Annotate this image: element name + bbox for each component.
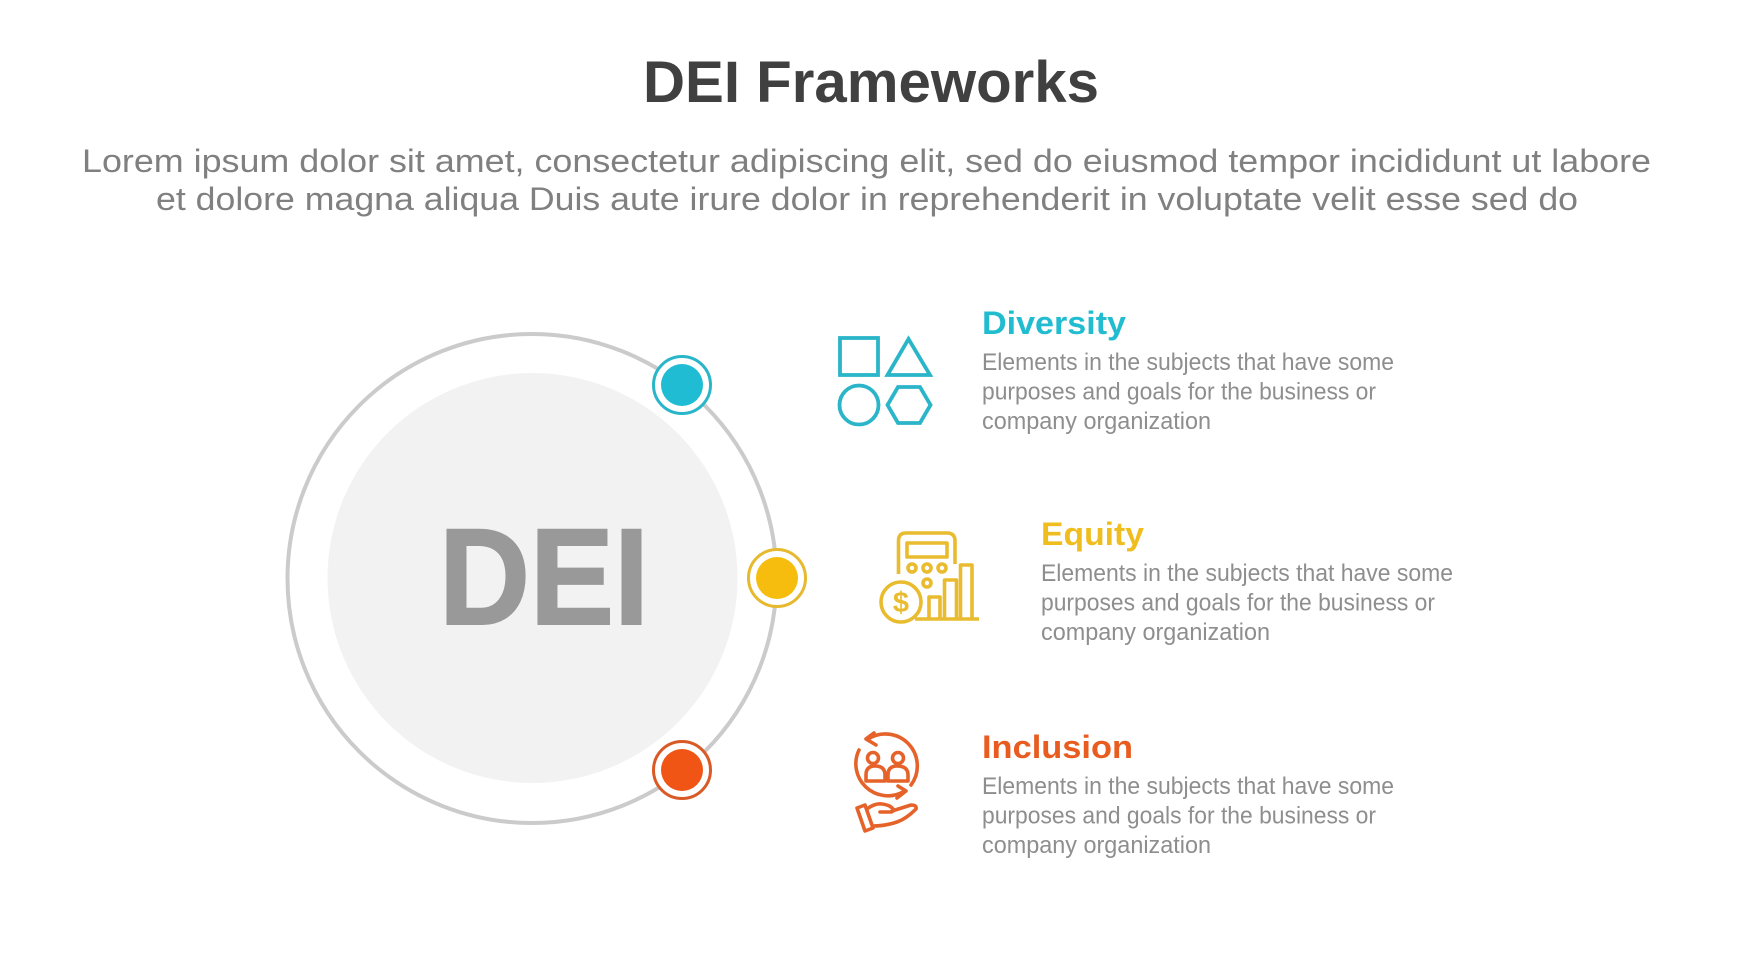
text: diversity body <box>982 349 1394 435</box>
text: diversity body: company organization <box>982 408 1211 435</box>
title: DEI Frameworks <box>643 50 1099 115</box>
inner circle <box>328 373 738 783</box>
panel: diversity <box>982 305 1394 435</box>
text: inclusion body <box>982 773 1394 859</box>
marker: diversity <box>654 356 710 414</box>
DEI label: DEI <box>439 501 649 654</box>
outer ring <box>288 334 776 823</box>
text: inclusion body: Elements in the subjects that have some <box>982 773 1394 800</box>
panel: equity <box>1041 516 1453 646</box>
icon: diversity shapes <box>840 338 930 424</box>
text: inclusion body: company organization <box>982 832 1211 859</box>
text: equity body: Elements in the subjects that have some <box>1041 560 1453 587</box>
heading: inclusion: Inclusion <box>982 729 1133 765</box>
heading: equity: Equity <box>1041 516 1144 552</box>
text: inclusion body: purposes and goals for the business or <box>982 802 1376 830</box>
text: equity body <box>1041 560 1453 646</box>
text: equity body: company organization <box>1041 619 1270 646</box>
text: equity body: purposes and goals for the business or <box>1041 590 1435 616</box>
text: diversity body: Elements in the subjects that have some <box>982 349 1394 376</box>
marker: equity <box>748 550 806 606</box>
icon: equity calculator and chart: $ <box>893 587 909 619</box>
subtitle: Lorem ipsum dolor sit amet, consectetur adipiscing elit, sed do eiusmod tempor incididunt ut labore <box>82 143 1651 179</box>
subtitle <box>82 143 1651 217</box>
icon: inclusion people and hand <box>856 733 917 831</box>
central circle diagram <box>288 334 806 823</box>
heading: diversity: Diversity <box>982 305 1126 341</box>
icon: equity calculator and chart <box>881 533 979 622</box>
subtitle: et dolore magna aliqua Duis aute irure dolor in reprehenderit in voluptate velit esse sed do <box>156 181 1578 217</box>
panel: inclusion <box>982 729 1394 859</box>
marker: inclusion <box>654 742 710 798</box>
text: diversity body: purposes and goals for the business or <box>982 378 1376 406</box>
